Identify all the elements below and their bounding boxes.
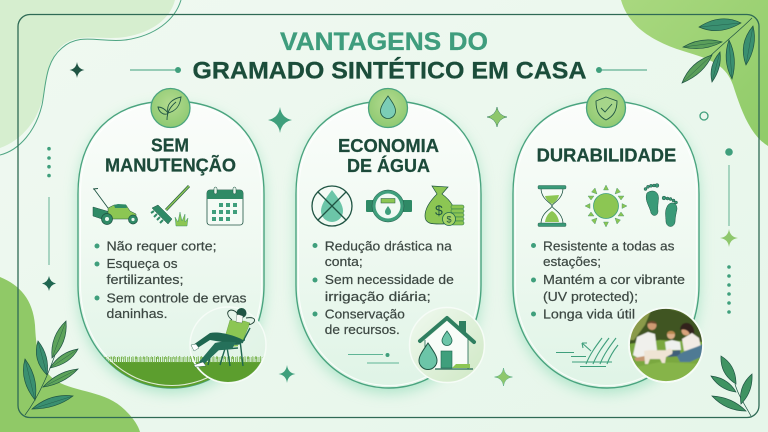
leaves: bottom right xyxy=(711,356,752,416)
bullet list: Não requer corte; xyxy=(106,238,216,254)
title divider right xyxy=(596,67,647,73)
bullet list xyxy=(94,238,247,321)
heading line 2: DE ÁGUA xyxy=(347,155,430,176)
icon: lawn mower xyxy=(93,188,138,224)
heading: ECONOMIA xyxy=(338,136,439,156)
bullet list: Esqueça os xyxy=(106,256,178,271)
chair xyxy=(208,326,250,366)
bullet list: irrigação diária; xyxy=(325,289,431,304)
bullet list: Conservação xyxy=(325,306,405,322)
blob: top left xyxy=(0,0,181,155)
bullet list: conta; xyxy=(325,254,363,269)
icon: money bag: $ xyxy=(446,214,452,224)
shirt xyxy=(225,320,250,340)
icon: calendar xyxy=(207,187,243,225)
bullet list: Mantém a cor vibrante xyxy=(543,272,685,287)
title divider left xyxy=(130,67,181,73)
head and arms xyxy=(236,308,246,318)
panel: economia de água xyxy=(296,88,484,393)
legs xyxy=(193,333,243,349)
bullet list: Resistente a todas as xyxy=(543,238,675,254)
illustration: man relaxing on lawn xyxy=(190,307,266,384)
bullet list: de recursos. xyxy=(325,322,400,337)
badge: water drop xyxy=(368,88,408,128)
icon: sun xyxy=(585,185,627,227)
panel: sem manutenção xyxy=(78,88,268,393)
blob: top right xyxy=(621,0,768,146)
icon: footprints xyxy=(644,184,678,226)
heading xyxy=(105,136,236,176)
bullet list: (UV protected); xyxy=(543,289,638,304)
icon: rake and grass xyxy=(151,186,189,226)
heading line 2: MANUTENÇÃO xyxy=(105,155,236,176)
bullet list xyxy=(312,238,454,337)
mum xyxy=(682,326,690,336)
heading xyxy=(338,136,439,176)
leaves: top right xyxy=(682,18,754,83)
title: VANTAGENS DO xyxy=(280,28,488,56)
trees and lawn xyxy=(630,308,702,344)
icon: hourglass xyxy=(538,186,566,226)
dog xyxy=(644,349,673,364)
illustration: house with water drop xyxy=(410,308,484,382)
icon: no water xyxy=(312,186,352,226)
decorative stars and dots xyxy=(42,62,738,386)
blob: bottom left xyxy=(0,277,140,432)
icon: water meter xyxy=(366,190,412,222)
bullet list: Sem necessidade de xyxy=(325,272,454,287)
icon: money bag: $ xyxy=(435,202,443,218)
bullet list xyxy=(531,238,685,322)
child xyxy=(667,331,675,339)
bullet list: Longa vida útil xyxy=(543,306,635,322)
dad xyxy=(633,332,657,359)
badge: shield xyxy=(586,88,626,128)
bullet list: daninhas. xyxy=(106,306,168,321)
badge: leaf xyxy=(151,88,190,128)
bullet list: Sem controle de ervas xyxy=(106,290,247,306)
heading: DURABILIDADE xyxy=(537,146,676,166)
bullet list: estações; xyxy=(543,254,601,269)
title xyxy=(192,28,587,84)
icon: grass durability lines xyxy=(556,338,618,366)
leaves: bottom left xyxy=(23,321,78,415)
title line 2: GRAMADO SINTÉTICO EM CASA xyxy=(192,56,587,84)
icon: money bag xyxy=(425,186,464,226)
heading: SEM xyxy=(151,136,189,156)
photo: family with dog on lawn xyxy=(628,307,704,384)
bullet list: Redução drástica na xyxy=(325,238,453,254)
panel: durabilidade xyxy=(513,88,704,393)
decorative lines xyxy=(348,353,399,363)
bullet list: fertilizantes; xyxy=(106,272,184,287)
grass strip xyxy=(103,356,210,388)
